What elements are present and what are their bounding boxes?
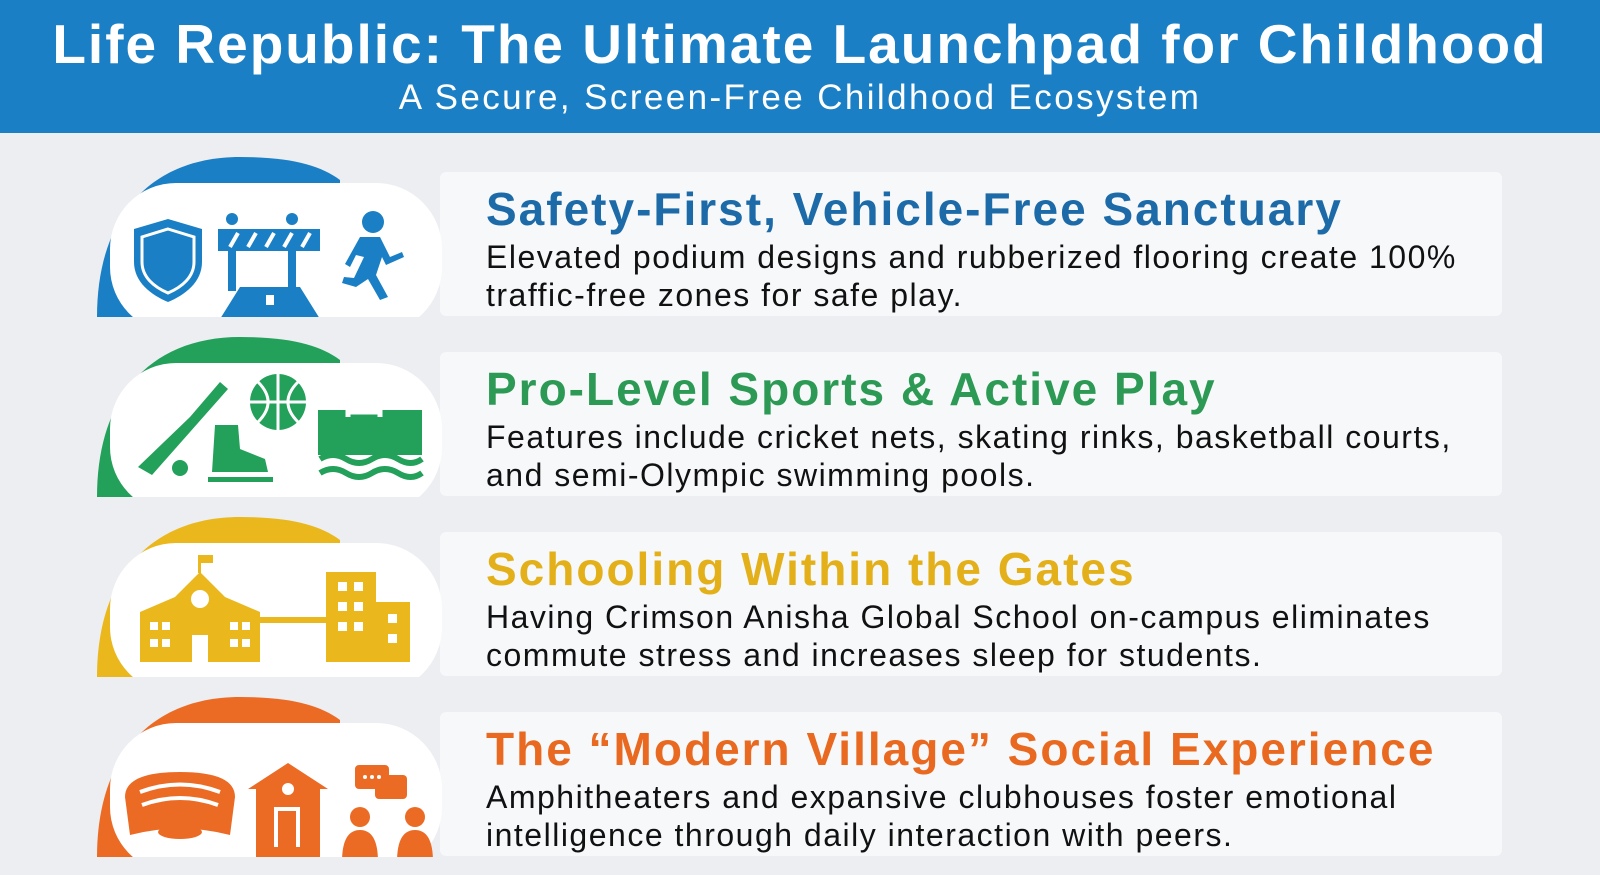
text: safety: Elevated podium designs and rubberized flooring create 100% xyxy=(486,239,1457,275)
text: schooling: Having Crimson Anisha Global School on-campus eliminates xyxy=(486,599,1431,635)
text: schooling xyxy=(486,543,1431,673)
text: schooling: commute stress and increases sleep for students. xyxy=(486,637,1262,673)
text: sports: Pro-Level Sports & Active Play xyxy=(486,363,1217,415)
text: sports xyxy=(486,363,1452,493)
header xyxy=(0,0,1600,133)
icon group: social xyxy=(97,697,442,857)
icon group: safety xyxy=(97,157,442,317)
panel: social xyxy=(97,697,1502,857)
text: schooling: Schooling Within the Gates xyxy=(486,543,1136,595)
text: safety: traffic-free zones for safe play. xyxy=(486,277,963,313)
text card background xyxy=(440,532,1502,676)
text: sports: Features include cricket nets, skating rinks, basketball courts, xyxy=(486,419,1452,455)
text card background xyxy=(440,712,1502,856)
icon group: sports xyxy=(97,337,442,497)
text: safety: Safety-First, Vehicle-Free Sanctuary xyxy=(486,183,1343,235)
text: safety xyxy=(486,183,1457,313)
title: Life Republic: The Ultimate Launchpad for Childhood xyxy=(52,13,1548,75)
text card background xyxy=(440,172,1502,316)
text: social xyxy=(486,723,1435,853)
text: social: The “Modern Village” Social Experience xyxy=(486,723,1435,775)
panel: sports xyxy=(97,337,1502,497)
panel: safety xyxy=(97,157,1502,317)
text: social: Amphitheaters and expansive clubhouses foster emotional xyxy=(486,779,1397,815)
subtitle: A Secure, Screen-Free Childhood Ecosystem xyxy=(399,78,1201,117)
panel: schooling xyxy=(97,517,1502,677)
text: social: intelligence through daily interaction with peers. xyxy=(486,817,1233,853)
text: sports: and semi-Olympic swimming pools. xyxy=(486,457,1035,493)
icon group: schooling xyxy=(97,517,442,677)
text card background xyxy=(440,352,1502,496)
